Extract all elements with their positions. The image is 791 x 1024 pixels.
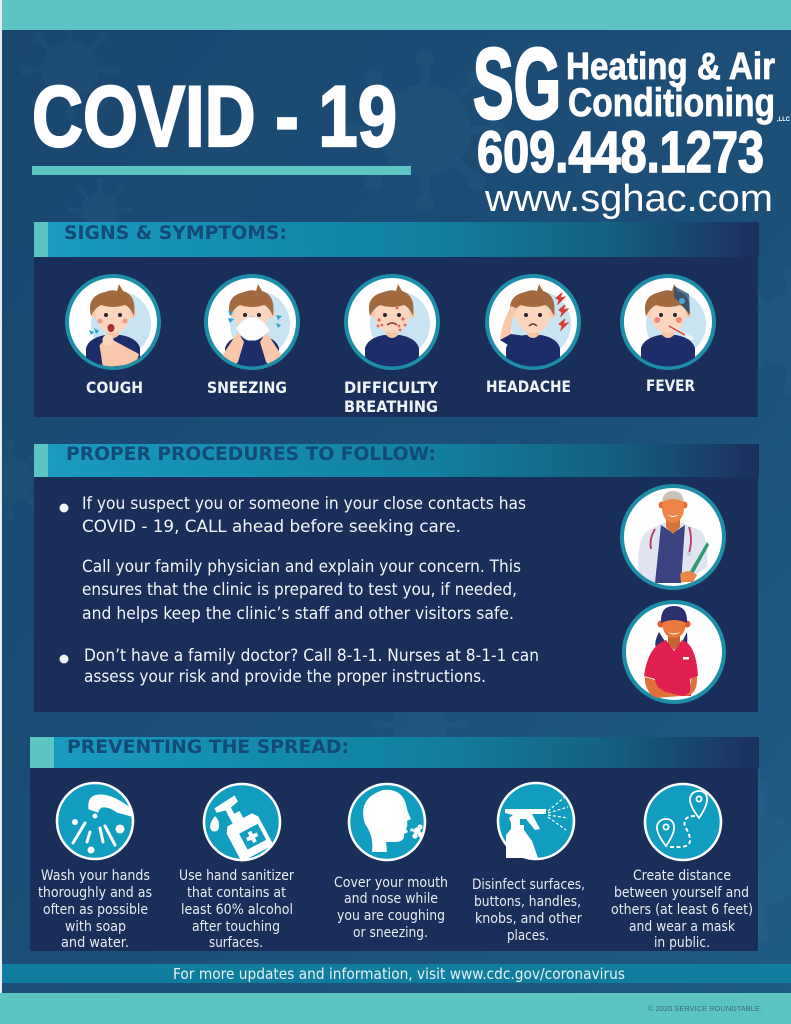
header bar [34, 444, 759, 477]
panel body [34, 477, 758, 712]
icon: nurse [624, 602, 724, 702]
icon: sneezing [206, 276, 298, 368]
text: disinfect: buttons, handles, [474, 893, 581, 910]
icon: hand sanitizer [204, 784, 280, 862]
label: difficulty: DIFFICULTY [344, 378, 438, 397]
text: distance: and wear a mask [629, 918, 735, 935]
icon: faucet and water [57, 783, 133, 859]
website: www.sghac.com [484, 178, 773, 220]
text: distance [611, 867, 753, 951]
paragraph 1: If you suspect you or someone in your close contacts has [82, 494, 526, 513]
title underline [32, 166, 411, 175]
text: wash hands: often as possible [43, 901, 148, 918]
panel: preventing the spread [30, 736, 759, 951]
icon: headache [487, 276, 579, 368]
text: hand sanitizer [179, 867, 294, 951]
heading: PROPER PROCEDURES TO FOLLOW: [66, 443, 436, 465]
text: cover mouth: Cover your mouth [334, 874, 448, 891]
paragraph 3: assess your risk and provide the proper instructions. [84, 667, 486, 686]
header bar [34, 222, 759, 257]
text: wash hands [38, 867, 152, 951]
text: distance: between yourself and [614, 884, 749, 901]
text: cover mouth: and nose while [344, 890, 438, 907]
text: disinfect: knobs, and other [475, 910, 582, 927]
panel: signs and symptoms [34, 222, 759, 417]
bottom teal band [0, 993, 791, 1024]
header tab [34, 222, 48, 257]
text: wash hands: thoroughly and as [38, 884, 152, 901]
text: hand sanitizer: Use hand sanitizer [179, 867, 294, 884]
panel body [30, 768, 758, 951]
text: distance: in public. [654, 934, 710, 951]
text: wash hands: with soap [65, 918, 126, 935]
label: sneezing: SNEEZING [207, 378, 287, 397]
text: hand sanitizer: that contains at [187, 884, 286, 901]
logo: SG: SG [473, 28, 561, 140]
footer text: For more updates and information, visit www.cdc.gov/coronavirus [173, 965, 625, 983]
header tab [34, 444, 48, 477]
text: disinfect: Disinfect surfaces, [472, 876, 585, 893]
paragraph 3: Don’t have a family doctor? Call 8-1-1. Nurses at 8-1-1 can [84, 646, 539, 665]
text: cover mouth: or sneezing. [353, 924, 428, 941]
text: cover mouth [334, 874, 448, 941]
bullet [60, 504, 68, 512]
footer bar [2, 964, 791, 983]
icon: doctor [622, 486, 724, 588]
label: cough: COUGH [86, 378, 143, 397]
company logo and contact [473, 28, 791, 220]
text: cover mouth: you are coughing [337, 907, 445, 924]
logo: LLC: ,LLC [777, 117, 791, 123]
paragraph 1 [82, 494, 526, 536]
text: distance: Create distance [633, 867, 731, 884]
text: distance: others (at least 6 feet) [611, 901, 753, 918]
bullet [60, 654, 68, 664]
paragraph 2: ensures that the clinic is prepared to test you, if needed, [82, 580, 517, 599]
label: headache: HEADACHE [486, 377, 571, 396]
paragraph 2: Call your family physician and explain your concern. This [82, 557, 521, 576]
paragraph 3 [84, 646, 539, 686]
title: COVID - 19: COVID - 19 [32, 69, 397, 165]
paragraph 2: and helps keep the clinic’s staff and other visitors safe. [82, 604, 514, 623]
text: disinfect [472, 876, 585, 944]
icon: cough [67, 276, 159, 368]
label: fever: FEVER [646, 376, 695, 395]
icon: fever [622, 276, 714, 368]
header bar [30, 737, 759, 768]
text: wash hands: and water. [61, 934, 129, 951]
icon: spray bottle [498, 783, 574, 859]
paragraph 2 [82, 557, 521, 623]
panel body [34, 257, 758, 417]
text: hand sanitizer: surfaces. [209, 934, 263, 951]
label: breathing: BREATHING [344, 397, 438, 416]
text: disinfect: places. [507, 927, 549, 944]
panel: proper procedures [34, 443, 759, 712]
icon: difficulty breathing [346, 276, 438, 368]
text: hand sanitizer: least 60% alcohol [181, 901, 293, 918]
text: hand sanitizer: after touching [192, 918, 280, 935]
icon: head coughing [349, 784, 425, 860]
top teal band [2, 0, 791, 30]
heading: SIGNS & SYMPTOMS: [64, 222, 287, 244]
header tab [30, 737, 54, 768]
heading: PREVENTING THE SPREAD: [67, 736, 349, 758]
paragraph 1: COVID - 19, CALL ahead before seeking care. [82, 517, 461, 536]
copyright: © 2020 SERVICE ROUNDTABLE. [648, 1004, 762, 1013]
icon: map route [645, 784, 721, 860]
text: wash hands: Wash your hands [41, 867, 150, 884]
